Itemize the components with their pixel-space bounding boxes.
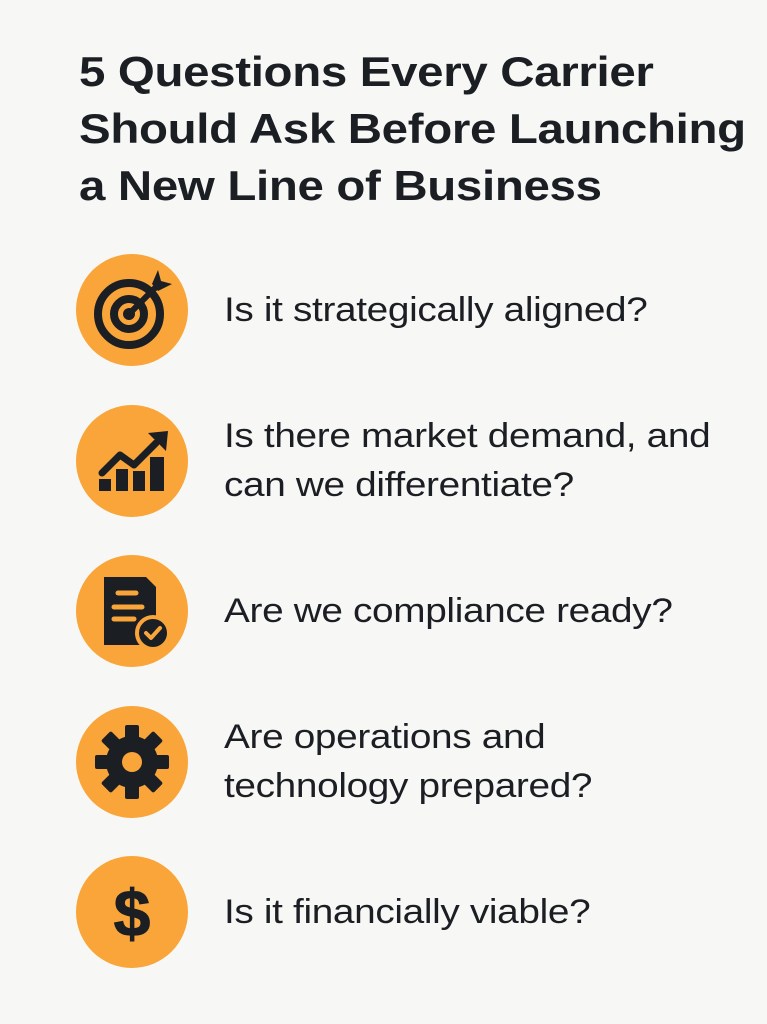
icon: dollar: $: [114, 876, 150, 950]
icon: target: [76, 254, 188, 366]
title: a New Line of Business: [79, 162, 602, 209]
text: [224, 718, 592, 805]
title: 5 Questions Every Carrier: [79, 48, 654, 95]
text: Is there market demand, and: [224, 417, 710, 455]
title: Should Ask Before Launching: [79, 105, 746, 152]
title: [79, 48, 746, 209]
item 5: financial viability: [76, 856, 590, 968]
text: Is it financially viable?: [224, 892, 590, 930]
icon: gear: [76, 706, 188, 818]
text: can we differentiate?: [224, 466, 574, 504]
text: [224, 417, 710, 504]
text: Is it strategically aligned?: [224, 290, 647, 328]
item 1: strategic alignment: [76, 254, 647, 366]
text: Are operations and: [224, 718, 545, 756]
icon: dollar: [76, 856, 188, 968]
item 3: compliance: [76, 555, 673, 667]
text: Are we compliance ready?: [224, 592, 673, 630]
text: technology prepared?: [224, 767, 592, 805]
icon: growth chart: [76, 405, 188, 517]
item 4: operations: [76, 706, 592, 818]
item 2: market demand: [76, 405, 710, 517]
icon: document check: [76, 555, 188, 667]
